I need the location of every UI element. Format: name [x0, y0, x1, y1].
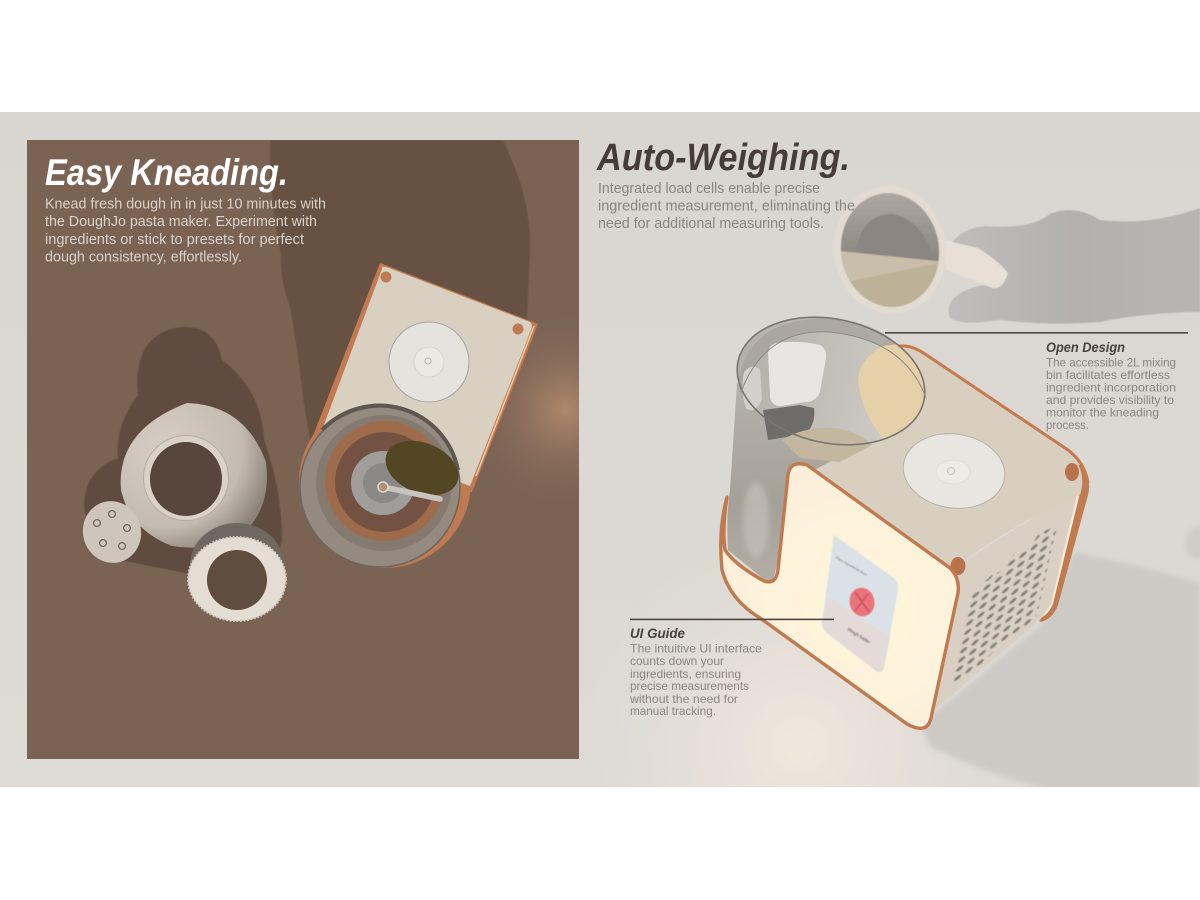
bin rear wall band: [738, 318, 926, 396]
page band background: [0, 112, 1200, 787]
measuring jug: [834, 186, 1008, 313]
bowl outer: [300, 407, 460, 567]
bin inner rim: [741, 332, 926, 398]
orange U-shaped body: [299, 263, 538, 492]
corner screw: top right: [1065, 463, 1079, 481]
text block: easy kneading description: Knead fresh dough in in just 10 minutes with: [45, 196, 326, 212]
callout: ui guide: UI Guide: [630, 625, 685, 641]
screen panel: [822, 535, 898, 672]
ring dark band: [190, 523, 284, 607]
corner screw: front: [950, 557, 966, 575]
screw top left: [380, 272, 392, 282]
head opening: [150, 442, 222, 516]
infographic canvas: [0, 112, 1200, 787]
dough in bin: [782, 428, 872, 462]
panel: auto-weighing scene: [579, 179, 1200, 790]
bin rim: [736, 316, 926, 446]
orange round base: [299, 396, 471, 568]
dough: [377, 431, 467, 505]
plate top: [322, 267, 532, 486]
machine rear plate edge: [1038, 465, 1089, 622]
screen button text: Weigh batter: [846, 627, 872, 645]
text block: auto-weighing description: Integrated load cells enable precise: [598, 181, 820, 197]
head body: [121, 403, 267, 548]
machine seen through bin: [858, 344, 924, 438]
dial icon: [425, 358, 431, 364]
callout: open design: bin facilitates effortless: [1046, 368, 1170, 382]
red indicator circle: [847, 585, 877, 619]
bin interior: [738, 318, 894, 442]
mixing bin: [727, 316, 926, 580]
kneading hook: [383, 487, 440, 499]
right edge highlight: [476, 326, 534, 476]
machine top view: [299, 263, 538, 568]
hand holding scoop: [948, 208, 1200, 324]
callout: ui guide: The intuitive UI interface: [630, 642, 762, 656]
text block: easy kneading description: the DoughJo pasta maker. Experiment with: [45, 214, 317, 230]
text block: easy kneading description: ingredients or stick to presets for perfect: [45, 232, 304, 248]
callout: open design: ingredient incorporation: [1046, 380, 1176, 394]
dial icon: [948, 468, 954, 474]
UI screen: [822, 535, 898, 672]
flour front face: [850, 264, 938, 306]
text block: auto-weighing description: need for additional measuring tools.: [598, 216, 824, 232]
callout: ui guide: [629, 625, 762, 718]
secondary shadow blob: [1186, 528, 1200, 558]
inner jug dark arch: [858, 214, 927, 244]
bin body: [727, 383, 831, 580]
callout: open design: process.: [1046, 418, 1089, 432]
dial centre: [414, 347, 444, 377]
callout: ui guide: manual tracking.: [630, 704, 716, 718]
bowl wall: [316, 415, 452, 551]
metal hub: [351, 451, 415, 515]
jug interior: [840, 192, 940, 308]
ring face: [188, 537, 286, 621]
screen prompt text: Place ingredients here: [834, 555, 867, 577]
perforated die disc: [76, 495, 148, 569]
flour in jug: [840, 250, 938, 282]
dial centre: [936, 460, 970, 484]
agitator bracket: [763, 405, 814, 440]
jug handle: [944, 240, 1008, 288]
callout: open design: and provides visibility to: [1046, 393, 1174, 407]
screen lower area: [822, 597, 890, 672]
red indicator cross: [855, 592, 869, 612]
jug spouts: [866, 186, 914, 208]
bowl dark floor: [335, 432, 435, 532]
ring hole: [207, 550, 267, 610]
callout: ui guide: counts down your: [630, 654, 724, 668]
callout leader: open design: [885, 332, 1188, 334]
left pad: [742, 366, 762, 410]
glowing front face: [721, 464, 958, 728]
machine top face: [800, 347, 1082, 570]
text block: auto-weighing description: ingredient measurement, eliminating the: [598, 198, 855, 214]
callout leader: ui guide: [630, 619, 834, 620]
text block: auto-weighing description: [598, 181, 855, 232]
panel background: [27, 140, 579, 759]
callout: open design: monitor the kneading: [1046, 406, 1159, 420]
metal hub inner: [363, 463, 403, 503]
vents on right face: [953, 527, 1057, 682]
bowl top shadow: [322, 406, 458, 470]
cream back plate: [1040, 492, 1079, 617]
table light glow: [708, 647, 892, 787]
large shadow from above: [270, 140, 530, 480]
interior wall: [840, 192, 940, 262]
white sensor pad: [768, 342, 826, 406]
screw top right: [512, 324, 524, 334]
warm light: [460, 280, 579, 540]
heading: auto-weighing: Auto-Weighing.: [596, 137, 850, 179]
hook hub: [378, 482, 388, 492]
disc holes: [94, 511, 130, 549]
dial disc: [902, 433, 1006, 509]
disc: [76, 495, 148, 569]
machine shadow on table: [920, 552, 1200, 790]
head collar: [144, 436, 228, 520]
control dial: [902, 433, 1006, 509]
bin lower highlight: [743, 482, 769, 558]
callout: open design: The accessible 2L mixing: [1046, 356, 1176, 370]
machine right face: [932, 490, 1078, 712]
machine top orange edge: [884, 346, 1088, 483]
threaded ring: [188, 523, 286, 621]
text block: easy kneading description: dough consistency, effortlessly.: [45, 250, 242, 266]
text block: easy kneading description: [45, 196, 326, 266]
bowl copper floor: [325, 421, 445, 541]
mixer head: [121, 403, 267, 548]
callout: ui guide: ingredients, ensuring: [630, 667, 741, 681]
panel: easy kneading: [27, 140, 579, 759]
callout: ui guide: precise measurements: [630, 679, 749, 693]
jug rim: [834, 190, 944, 313]
dial disc: [389, 322, 469, 402]
callout: open design: [1046, 339, 1176, 432]
callout: open design: Open Design: [1046, 339, 1125, 355]
attachment shadow: [84, 327, 282, 590]
callout: ui guide: without the need for: [629, 692, 738, 706]
heading: easy kneading: Easy Kneading.: [45, 152, 288, 193]
